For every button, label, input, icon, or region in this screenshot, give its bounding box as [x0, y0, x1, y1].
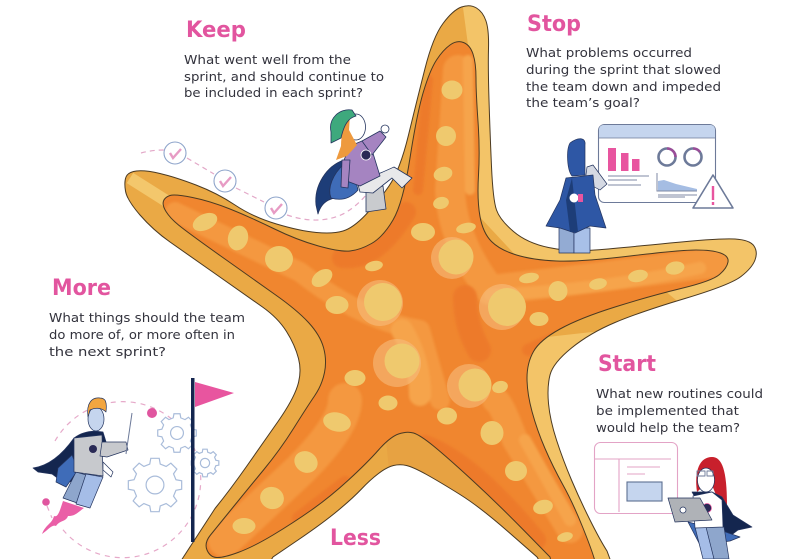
icon: warning triangle [693, 175, 733, 208]
text: More description: do more of, or more often in [49, 327, 235, 342]
text: More description: the next sprint? [49, 344, 166, 359]
panel: wireframe window [594, 442, 678, 514]
text: Stop description: the team down and impeded [526, 79, 721, 94]
dashed orbit circle [47, 402, 201, 558]
heading: Start: Start [598, 352, 656, 377]
donut charts [658, 148, 702, 166]
text: More description [49, 310, 245, 359]
spots [190, 80, 686, 543]
chart caption lines [608, 176, 649, 185]
spot halos [357, 237, 525, 408]
area chart [657, 173, 697, 197]
text: Keep description: What went well from the [184, 52, 351, 67]
text: Keep description: sprint, and should continue to [184, 69, 384, 84]
heading: Stop: Stop [527, 12, 581, 37]
text: Start description: would help the team? [596, 420, 740, 435]
icon: small gear [191, 449, 219, 477]
section: Keep [141, 18, 412, 220]
character: flying man with pointer [33, 398, 132, 534]
text: Stop description [526, 45, 721, 110]
illustration: More character, gears and flag background [47, 402, 219, 558]
text: Keep description: be included in each sprint? [184, 85, 363, 100]
starfish inner body [150, 30, 750, 559]
text: Stop description: during the sprint that slowed [526, 62, 721, 77]
icon: flag [191, 378, 234, 542]
panel: dashboard window [598, 124, 716, 202]
character: climbing girl [316, 110, 412, 214]
heading: Less: Less [330, 526, 381, 551]
bar chart [608, 148, 640, 171]
text: Stop description: What problems occurred [526, 45, 692, 60]
lighter shading [175, 60, 720, 540]
starfish [124, 5, 757, 559]
character: man with cape viewing dashboard [546, 139, 607, 253]
character: girl with laptop [668, 457, 752, 559]
text: Keep description [184, 52, 384, 100]
icon: pink dots [42, 408, 157, 506]
heading: More: More [52, 276, 111, 301]
section: Stop [526, 12, 733, 253]
icon: check 2 [214, 170, 236, 192]
icon: medium gear [158, 414, 196, 452]
dashed trail [141, 150, 366, 220]
starfish outlines [125, 6, 756, 559]
icon: check 1 [164, 142, 186, 164]
text: Start description: be implemented that [596, 403, 739, 418]
text: Stop description: the team’s goal? [526, 95, 640, 110]
section: Start [594, 352, 763, 559]
text: More description: What things should the team [49, 310, 245, 325]
icon: large gear [128, 458, 182, 512]
starfish outer band [125, 6, 756, 559]
section: More [33, 276, 245, 542]
heading: Keep: Keep [186, 18, 246, 43]
icon: check 3 [265, 197, 287, 219]
text: Start description [596, 386, 763, 435]
darker shading [298, 80, 585, 540]
text: Start description: What new routines could [596, 386, 763, 401]
